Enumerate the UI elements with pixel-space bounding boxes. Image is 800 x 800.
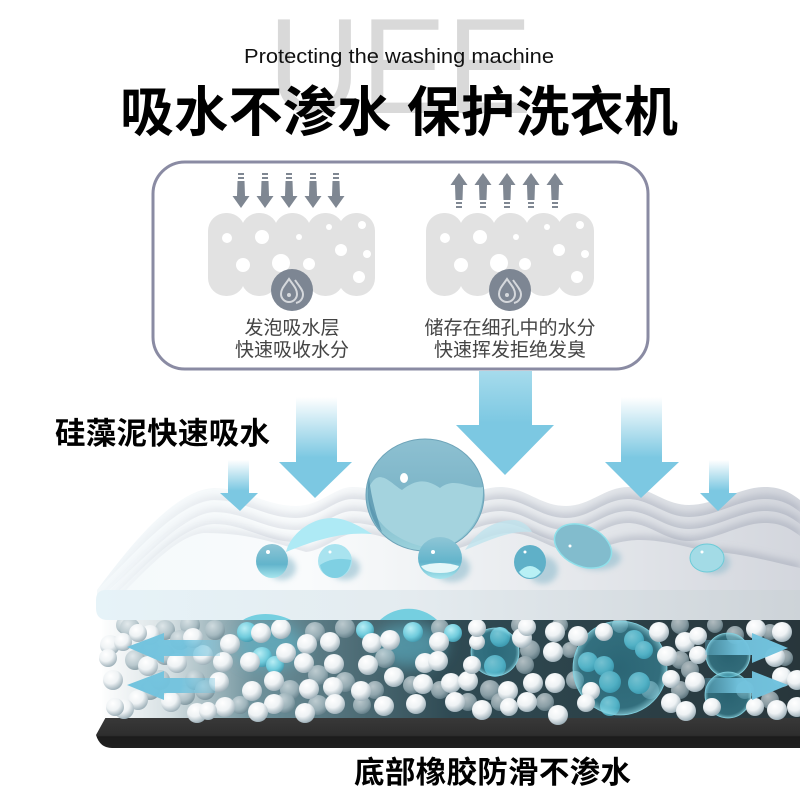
small droplet 4 (514, 545, 546, 579)
foam layer left (208, 213, 375, 296)
arrows down (232, 173, 344, 208)
title: 吸水不渗水 保护洗衣机 (120, 83, 678, 143)
small droplet 1 (256, 544, 288, 578)
subtitle: Protecting the washing machine (244, 46, 554, 68)
water seeping into balls (243, 609, 437, 620)
panel: absorption and evaporation (153, 162, 648, 369)
caption left (235, 317, 349, 361)
ball layer (99, 615, 800, 725)
rubber base (96, 715, 800, 748)
arrows: sideways right (705, 633, 788, 700)
slab surface waves (97, 487, 800, 594)
caption right: 储存在细孔中的水分 (424, 317, 596, 339)
droplet shadows (268, 546, 730, 584)
blue seepage glow (235, 623, 445, 667)
water arrows down (220, 371, 737, 511)
water droplets (256, 439, 730, 584)
icon: water drops left (271, 269, 313, 311)
slab front edge (96, 590, 800, 620)
diatom mud slab (90, 480, 800, 620)
water film right (465, 520, 532, 550)
caption right (424, 317, 596, 361)
arrows: sideways left (127, 633, 220, 700)
label: diatom mud: 硅藻泥快速吸水 (55, 417, 270, 451)
water bubbles (471, 621, 751, 718)
small droplet 6 (690, 544, 724, 572)
label: rubber base: 底部橡胶防滑不渗水 (354, 756, 631, 790)
caption left: 发泡吸水层 (244, 317, 340, 339)
small droplet 2 (318, 544, 352, 578)
blue balls (237, 621, 653, 716)
background balls (116, 615, 793, 715)
arrows up (450, 173, 564, 208)
foreground balls (99, 618, 800, 725)
foam layer right (426, 213, 594, 296)
small droplet 3 (418, 537, 462, 579)
large droplet (366, 439, 484, 551)
water film left (286, 518, 372, 552)
caption right: 快速挥发拒绝发臭 (434, 339, 586, 361)
icon: water drops right (489, 269, 531, 311)
caption left: 快速吸收水分 (235, 339, 349, 361)
small droplet 5 (547, 515, 619, 577)
